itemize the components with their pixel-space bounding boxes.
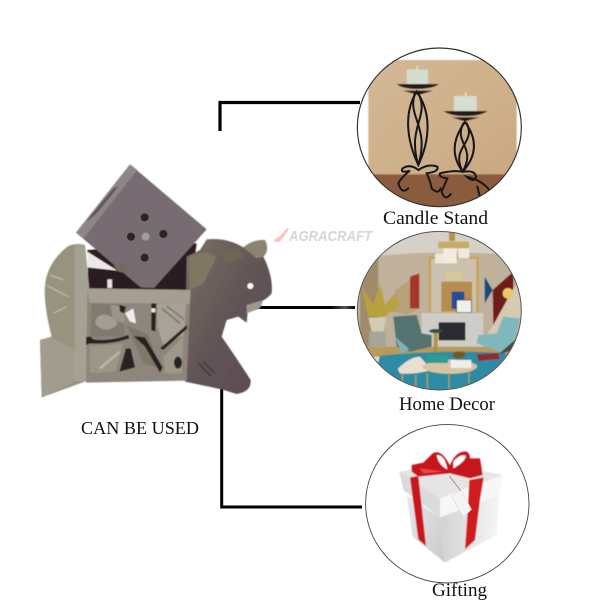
large candle: [407, 69, 428, 84]
elephant head and trunk: [185, 239, 272, 394]
gift tag: [452, 490, 472, 517]
large stand frame: [408, 92, 428, 165]
plant: [362, 283, 400, 317]
connector: middle line to Home Decor: [255, 306, 355, 309]
carved front panel: [86, 288, 191, 383]
icon: pink brush: [274, 228, 289, 242]
lid skirt: [399, 472, 440, 517]
watermark text: AGRACRAFT: [288, 228, 374, 245]
panel: Candle Stand: [357, 48, 521, 208]
wall art: [392, 280, 419, 316]
dark box interior: [87, 243, 197, 292]
coffee tables: [398, 357, 432, 374]
circle outline: [366, 424, 529, 583]
label: Home Decor: Home Decor: [399, 395, 495, 415]
circle outline: [357, 48, 521, 207]
chandelier: [449, 232, 455, 241]
panel: Gifting: [366, 424, 529, 583]
mirror: [429, 257, 479, 313]
chairs: [393, 315, 432, 352]
label: Candle Stand: Candle Stand: [383, 209, 489, 229]
box body: [407, 495, 445, 563]
bow: [412, 451, 483, 478]
label: Can Be Used: CAN BE USED: [81, 418, 199, 438]
product: soapstone elephant box: [40, 164, 272, 397]
side table: [434, 331, 438, 352]
watermark: Agracraft: [274, 228, 374, 245]
lid holes: [127, 213, 167, 262]
circle outline: [357, 231, 521, 390]
ribbon: [410, 476, 426, 546]
icon: gift box: [399, 451, 503, 563]
carved openings: [86, 303, 187, 373]
small stand frame: [455, 122, 474, 172]
connector: top line to Candle Stand: [220, 102, 360, 131]
elephant rear: [40, 244, 89, 397]
panel: Home Decor: [356, 230, 522, 390]
fireplace: [422, 313, 483, 350]
lid top: [399, 463, 503, 498]
connector: lower line to Gifting: [222, 385, 362, 507]
photo: living room: [358, 232, 521, 390]
small candle: [454, 96, 477, 113]
tilted lid: [76, 164, 207, 288]
photo: candle stands: [368, 60, 517, 208]
floor and rug: [350, 347, 530, 357]
